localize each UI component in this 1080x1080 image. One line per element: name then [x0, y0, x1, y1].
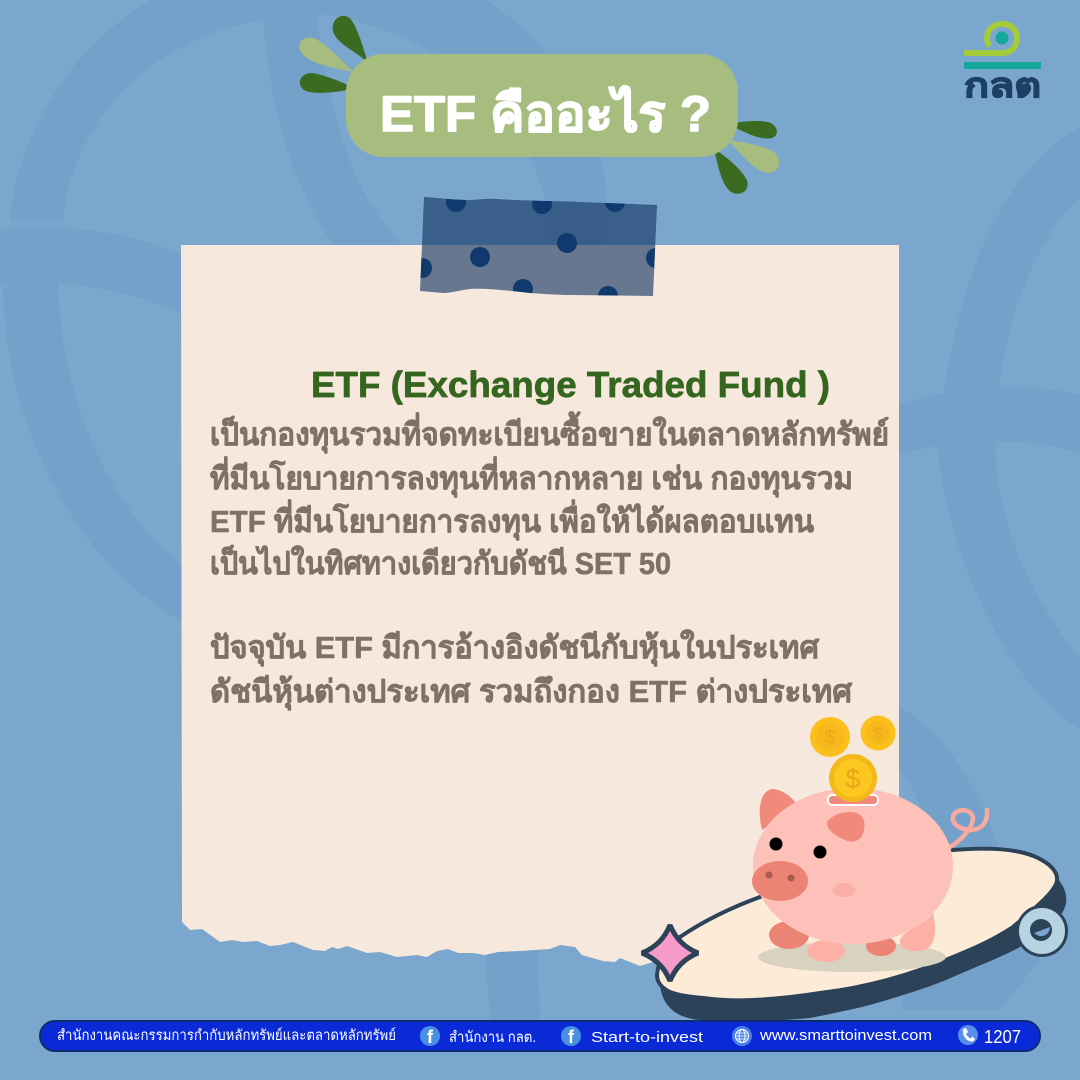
- logo: SEC Thailand: กลต: [964, 67, 1041, 105]
- title badge: [299, 16, 779, 194]
- icon: phone: [958, 1025, 978, 1045]
- text block: current ETF references: ดัชนีหุ้นต่างประเทศ รวมถึงกอง ETF ต่างประเทศ: [210, 674, 853, 711]
- icon: facebook: [420, 1026, 440, 1047]
- coin slot: [828, 795, 878, 805]
- pig ear: [760, 789, 797, 830]
- title pill: [346, 54, 738, 157]
- heading: ETF full name: ETF (Exchange Traded Fund ): [311, 364, 830, 405]
- footer contact bar: [40, 1021, 1040, 1051]
- icon: right leaf burst: [714, 121, 779, 194]
- icon: facebook: f: [568, 1027, 575, 1047]
- gold coins: $: [873, 724, 883, 743]
- wheel: [1018, 906, 1066, 956]
- footer: website: www.smarttoinvest.com: [759, 1027, 932, 1044]
- illustration: skateboard: [657, 849, 1066, 1021]
- icon: facebook: f: [427, 1027, 434, 1047]
- footer: facebook page start-to-invest: Start-to-invest: [591, 1029, 704, 1046]
- footer: hotline: 1207: [984, 1027, 1021, 1047]
- gold coins: [810, 716, 896, 802]
- panel: torn paper note: [181, 245, 899, 966]
- icon: globe: [732, 1026, 752, 1046]
- pig snout: [752, 861, 808, 901]
- text block: current ETF references: [210, 629, 853, 711]
- shadow: [758, 942, 946, 972]
- footer: facebook page SEC: สำนักงาน กลต.: [449, 1029, 536, 1046]
- gold coins: $: [824, 727, 836, 749]
- pig near legs: [807, 913, 935, 962]
- illustration: star sparkle: [642, 925, 698, 981]
- gold coins: $: [845, 764, 861, 794]
- icon: left leaf burst: [299, 16, 368, 93]
- illustration: piggy bank: [752, 716, 987, 972]
- text block: ETF definition: [210, 411, 889, 581]
- logo: SEC Thailand: [964, 24, 1041, 105]
- pig tail: [950, 810, 987, 847]
- text block: ETF definition: ที่มีนโยบายการลงทุนที่หลากหลาย เช่น กองทุนรวม: [210, 456, 853, 498]
- icon: facebook: [561, 1026, 581, 1047]
- text block: current ETF references: ปัจจุบัน ETF มีการอ้างอิงดัชนีกับหุ้นในประเทศ: [210, 629, 820, 667]
- board underside: [660, 878, 1066, 1021]
- washi tape: [420, 197, 657, 296]
- text block: ETF definition: เป็นไปในทิศทางเดียวกับดัชนี SET 50: [210, 544, 671, 581]
- footer: organisation name: สำนักงานคณะกรรมการกำกับหลักทรัพย์และตลาดหลักทรัพย์: [57, 1027, 396, 1044]
- pig body: [753, 788, 953, 944]
- pig patch: [827, 812, 864, 842]
- board deck: [657, 849, 1057, 1000]
- pig eyes: [770, 838, 826, 858]
- text block: ETF definition: ETF ที่มีนโยบายการลงทุน เพื่อให้ได้ผลตอบแทน: [210, 499, 814, 541]
- title text: ETF คืออะไร ?: [380, 85, 711, 142]
- text block: ETF definition: เป็นกองทุนรวมที่จดทะเบียนซื้อขายในตลาดหลักทรัพย์: [210, 411, 889, 454]
- pig far legs: [769, 921, 896, 956]
- pig cheek: [833, 883, 855, 897]
